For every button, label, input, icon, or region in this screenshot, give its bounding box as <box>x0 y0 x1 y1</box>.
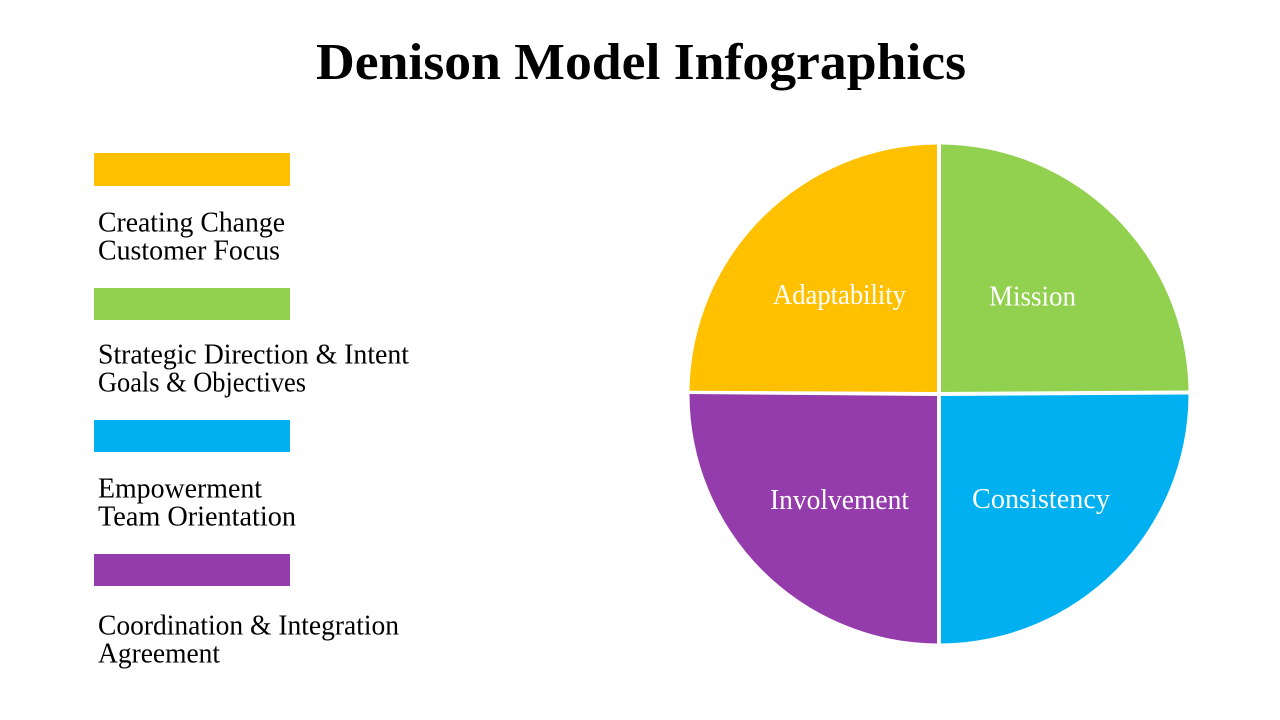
segment: adaptability: Adaptability <box>773 280 906 311</box>
legend text: adaptability items <box>98 208 285 266</box>
legend bar: yellow <box>94 153 290 186</box>
segment: involvement: Involvement <box>770 485 909 516</box>
legend text: involvement items: Team Orientation <box>98 502 296 532</box>
segment: mission: Mission <box>989 282 1076 312</box>
legend text: mission items: Strategic Direction & Intent <box>98 340 409 370</box>
legend text: consistency items: Coordination & Integration <box>98 610 399 642</box>
legend <box>94 153 409 670</box>
legend text: involvement items <box>98 474 296 532</box>
legend bar: green <box>94 288 290 320</box>
segment: consistency: Consistency <box>972 484 1110 515</box>
segment: involvement <box>689 394 937 644</box>
segment: mission <box>941 144 1188 392</box>
legend text: consistency items: Agreement <box>98 638 220 670</box>
legend text: mission items: Goals & Objectives <box>98 368 306 398</box>
title: Denison Model Infographics <box>316 34 966 91</box>
pie chart <box>689 144 1188 644</box>
legend bar: blue <box>94 420 290 452</box>
segment: consistency <box>941 394 1188 644</box>
legend text: adaptability items: Customer Focus <box>98 236 280 266</box>
legend text: involvement items: Empowerment <box>98 474 262 504</box>
legend text: adaptability items: Creating Change <box>98 208 285 238</box>
legend text: mission items <box>98 340 409 398</box>
legend text: consistency items <box>98 610 399 670</box>
legend bar: purple <box>94 554 290 586</box>
segment: adaptability <box>690 144 937 392</box>
